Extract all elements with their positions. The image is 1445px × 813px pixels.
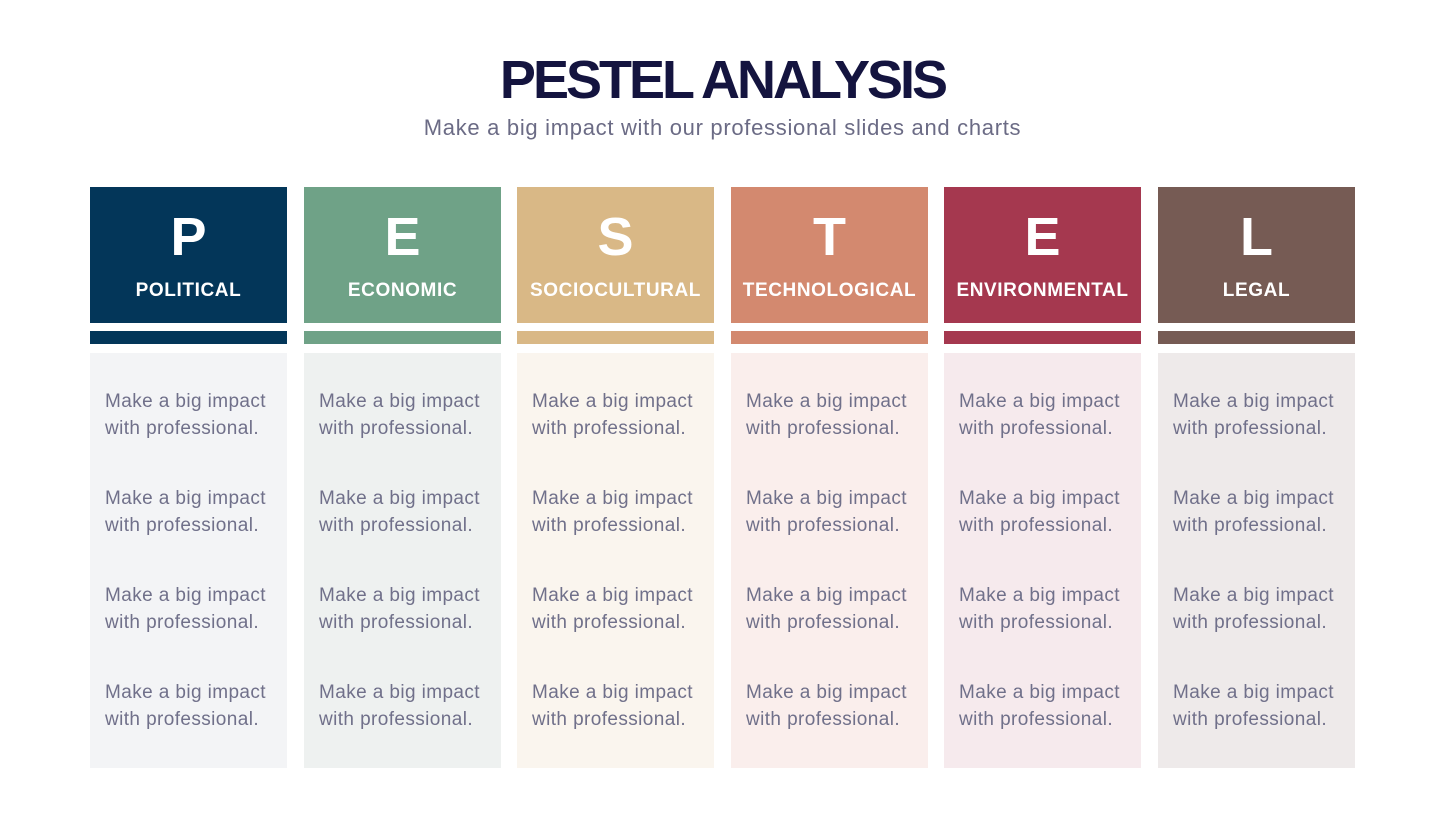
panel: sociocultural: with professional. bbox=[532, 709, 686, 730]
title: PESTEL ANALYSIS bbox=[500, 50, 945, 110]
panel: legal: with professional. bbox=[1173, 418, 1327, 439]
panel: environmental: ENVIRONMENTAL bbox=[956, 280, 1129, 301]
panel: technological: T bbox=[813, 207, 846, 267]
panel: legal: with professional. bbox=[1173, 515, 1327, 536]
panel: technological: Make a big impact bbox=[746, 585, 907, 606]
panel: technological: with professional. bbox=[746, 418, 900, 439]
panel: legal: with professional. bbox=[1173, 709, 1327, 730]
panel: legal: Make a big impact bbox=[1173, 488, 1334, 509]
panel: environmental: Make a big impact bbox=[959, 488, 1120, 509]
panel: economic: with professional. bbox=[319, 515, 473, 536]
panel: legal: with professional. bbox=[1173, 612, 1327, 633]
panel: legal: Make a big impact bbox=[1173, 391, 1334, 412]
panel: political bbox=[90, 187, 287, 768]
panel: economic: with professional. bbox=[319, 612, 473, 633]
panel: political: with professional. bbox=[105, 709, 259, 730]
panel: political: Make a big impact bbox=[105, 391, 266, 412]
panel: political: P bbox=[170, 207, 207, 267]
panel: political: Make a big impact bbox=[105, 682, 266, 703]
panel: environmental: Make a big impact bbox=[959, 585, 1120, 606]
panel: sociocultural: SOCIOCULTURAL bbox=[530, 280, 701, 301]
panel: environmental: with professional. bbox=[959, 515, 1113, 536]
panel: political: with professional. bbox=[105, 418, 259, 439]
panel: political: Make a big impact bbox=[105, 585, 266, 606]
panel: legal: LEGAL bbox=[1223, 280, 1290, 301]
panel: economic: Make a big impact bbox=[319, 682, 480, 703]
panel: technological: Make a big impact bbox=[746, 391, 907, 412]
panel: technological: TECHNOLOGICAL bbox=[743, 280, 916, 301]
panel: sociocultural: Make a big impact bbox=[532, 585, 693, 606]
panel: technological: with professional. bbox=[746, 612, 900, 633]
panel: sociocultural: with professional. bbox=[532, 612, 686, 633]
panel: sociocultural: Make a big impact bbox=[532, 391, 693, 412]
panel: sociocultural: Make a big impact bbox=[532, 682, 693, 703]
panel: technological: Make a big impact bbox=[746, 682, 907, 703]
panel: sociocultural: with professional. bbox=[532, 515, 686, 536]
panel: environmental: E bbox=[1024, 207, 1061, 267]
panel: economic: with professional. bbox=[319, 418, 473, 439]
panel: political: Make a big impact bbox=[105, 488, 266, 509]
panel: economic: Make a big impact bbox=[319, 488, 480, 509]
panel: legal bbox=[1158, 187, 1355, 768]
panel: economic: ECONOMIC bbox=[348, 280, 457, 301]
panel: technological: with professional. bbox=[746, 709, 900, 730]
subtitle: Make a big impact with our professional slides and charts bbox=[424, 115, 1021, 140]
panel: economic: Make a big impact bbox=[319, 391, 480, 412]
panel: environmental: with professional. bbox=[959, 709, 1113, 730]
panel: technological bbox=[731, 187, 928, 768]
panel: environmental: Make a big impact bbox=[959, 391, 1120, 412]
panel: political: POLITICAL bbox=[136, 280, 241, 301]
panel: sociocultural bbox=[517, 187, 714, 768]
panel: environmental: Make a big impact bbox=[959, 682, 1120, 703]
panel: economic bbox=[304, 187, 501, 768]
panel: political: with professional. bbox=[105, 612, 259, 633]
panel: technological: Make a big impact bbox=[746, 488, 907, 509]
panel: sociocultural: with professional. bbox=[532, 418, 686, 439]
panel: economic: with professional. bbox=[319, 709, 473, 730]
panel: legal: Make a big impact bbox=[1173, 682, 1334, 703]
panel: legal: L bbox=[1240, 207, 1273, 267]
panel: economic: E bbox=[384, 207, 421, 267]
panel: environmental bbox=[944, 187, 1141, 768]
panel: sociocultural: Make a big impact bbox=[532, 488, 693, 509]
panel: environmental: with professional. bbox=[959, 418, 1113, 439]
panel: environmental: with professional. bbox=[959, 612, 1113, 633]
panel: economic: Make a big impact bbox=[319, 585, 480, 606]
panel: legal: Make a big impact bbox=[1173, 585, 1334, 606]
panel: political: with professional. bbox=[105, 515, 259, 536]
panel: technological: with professional. bbox=[746, 515, 900, 536]
panel: sociocultural: S bbox=[597, 207, 634, 267]
